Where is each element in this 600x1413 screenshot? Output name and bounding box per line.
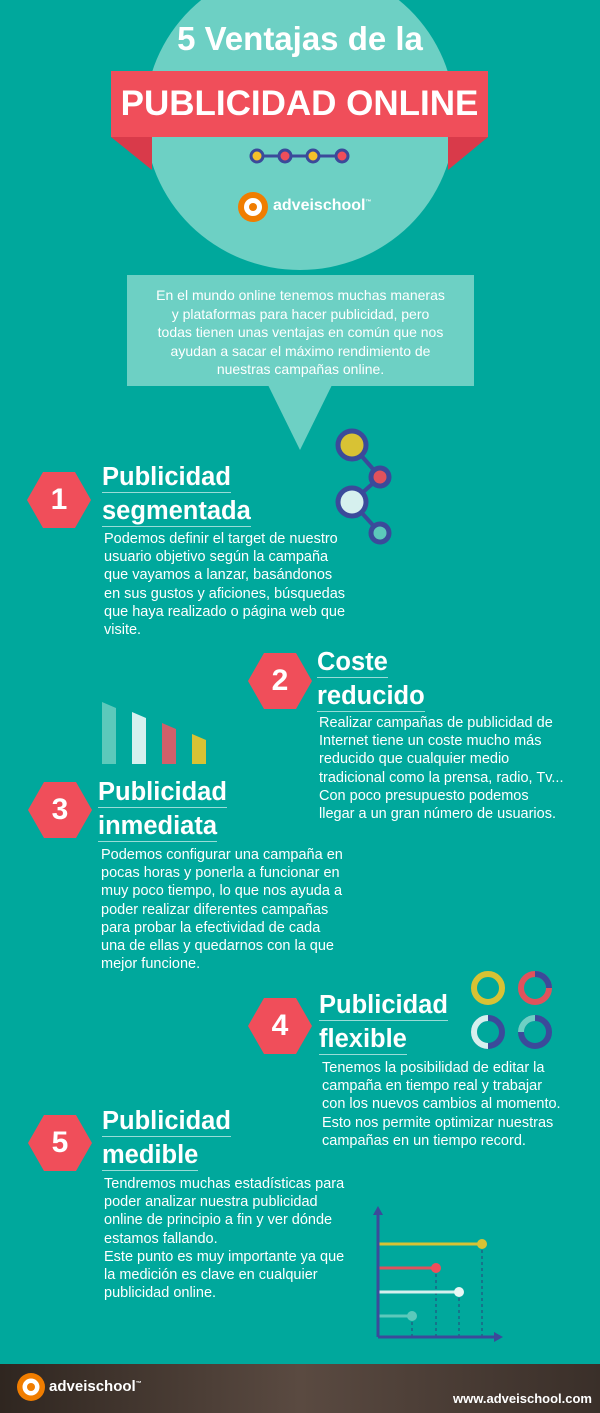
section 1: Podemos definir el target de nuestro <box>104 531 338 547</box>
section 2: Coste <box>317 648 388 676</box>
section 4: campañas en un tiempo record. <box>322 1133 526 1149</box>
section 3: una de ellas y quedarnos con la que <box>101 938 334 954</box>
section 5: 5 <box>52 1126 68 1159</box>
section 3: Publicidad <box>98 778 227 806</box>
section 3: pocas horas y ponerla a funcionar en <box>101 865 340 881</box>
section 2: reducido <box>317 682 425 710</box>
header circle <box>145 0 455 270</box>
logo: adveischool™ <box>273 197 371 214</box>
section 5: medible <box>102 1141 198 1169</box>
section 5: Este punto es muy importante ya que <box>104 1249 344 1265</box>
section 3: inmediata <box>98 812 217 840</box>
section 2 <box>248 648 563 822</box>
section 1: 1 <box>51 483 67 516</box>
section 5: Tendremos muchas estadísticas para <box>104 1176 344 1192</box>
arrow <box>268 386 332 450</box>
icon: bars <box>102 702 206 764</box>
section 2: llegar a un gran número de usuarios. <box>319 806 556 822</box>
icon: network <box>336 428 392 544</box>
section 4: Publicidad <box>319 991 448 1019</box>
section 4: Tenemos la posibilidad de editar la <box>322 1060 544 1076</box>
section 1: que haya realizado o página web que <box>104 604 345 620</box>
section 2: Con poco presupuesto podemos <box>319 788 529 804</box>
intro text box: nuestras campañas online. <box>217 361 384 377</box>
title banner: PUBLICIDAD ONLINE <box>121 84 478 123</box>
section 5 <box>28 1107 344 1301</box>
section 3: poder realizar diferentes campañas <box>101 902 328 918</box>
logo <box>238 192 371 222</box>
section 4 <box>248 991 561 1149</box>
section 5: estamos fallando. <box>104 1231 218 1247</box>
section 4: campaña en tiempo real y trabajar <box>322 1078 542 1094</box>
section 4: con los nuevos cambios al momento. <box>322 1096 561 1112</box>
intro text box <box>127 275 474 386</box>
footer logo <box>17 1373 142 1401</box>
icon: dots line <box>250 148 350 164</box>
section 3: muy poco tiempo, lo que nos ayuda a <box>101 883 342 899</box>
section 4: 4 <box>272 1009 288 1042</box>
section 2: reducido que cualquier medio <box>319 751 509 767</box>
title line 1: 5 Ventajas de la <box>177 20 423 57</box>
section 2: tradicional como la prensa, radio, Tv... <box>319 770 563 786</box>
title banner <box>111 71 488 137</box>
section 5: poder analizar nuestra publicidad <box>104 1194 318 1210</box>
icon: donuts <box>471 971 552 1049</box>
intro text box: todas tienen unas ventajas en común que nos <box>158 324 443 340</box>
footer logo: adveischool™ <box>49 1378 142 1395</box>
section 5: publicidad online. <box>104 1285 216 1301</box>
section 3 <box>28 778 343 972</box>
chart <box>373 1206 503 1342</box>
section 1 <box>27 463 345 638</box>
section 1: segmentada <box>102 497 251 525</box>
section 5: online de principio a fin y ver dónde <box>104 1212 332 1228</box>
intro text box: ayudan a sacar el máximo rendimiento de <box>171 342 430 358</box>
section 5: Publicidad <box>102 1107 231 1135</box>
section 3: mejor funcione. <box>101 956 200 972</box>
section 4: Esto nos permite optimizar nuestras <box>322 1115 553 1131</box>
section 1: usuario objetivo según la campaña <box>104 549 328 565</box>
section 2: Internet tiene un coste mucho más <box>319 733 541 749</box>
section 2: Realizar campañas de publicidad de <box>319 715 553 731</box>
intro text box: y plataformas para hacer publicidad, pero <box>172 306 429 322</box>
section 1: visite. <box>104 622 141 638</box>
section 3: para probar la efectividad de cada <box>101 920 320 936</box>
section 1: en sus gustos y aficiones, búsquedas <box>104 586 345 602</box>
footer url: www.adveischool.com <box>453 1391 592 1406</box>
section 4: flexible <box>319 1025 407 1053</box>
section 5: la medición es clave en cualquier <box>104 1267 318 1283</box>
section 2: 2 <box>272 664 288 697</box>
banner ribbon tails <box>111 137 488 170</box>
section 3: 3 <box>52 793 68 826</box>
section 1: Publicidad <box>102 463 231 491</box>
section 1: que vayamos a lanzar, basándonos <box>104 567 332 583</box>
footer <box>0 1364 600 1413</box>
section 3: Podemos configurar una campaña en <box>101 847 343 863</box>
intro text box: En el mundo online tenemos muchas maneras <box>156 287 445 303</box>
